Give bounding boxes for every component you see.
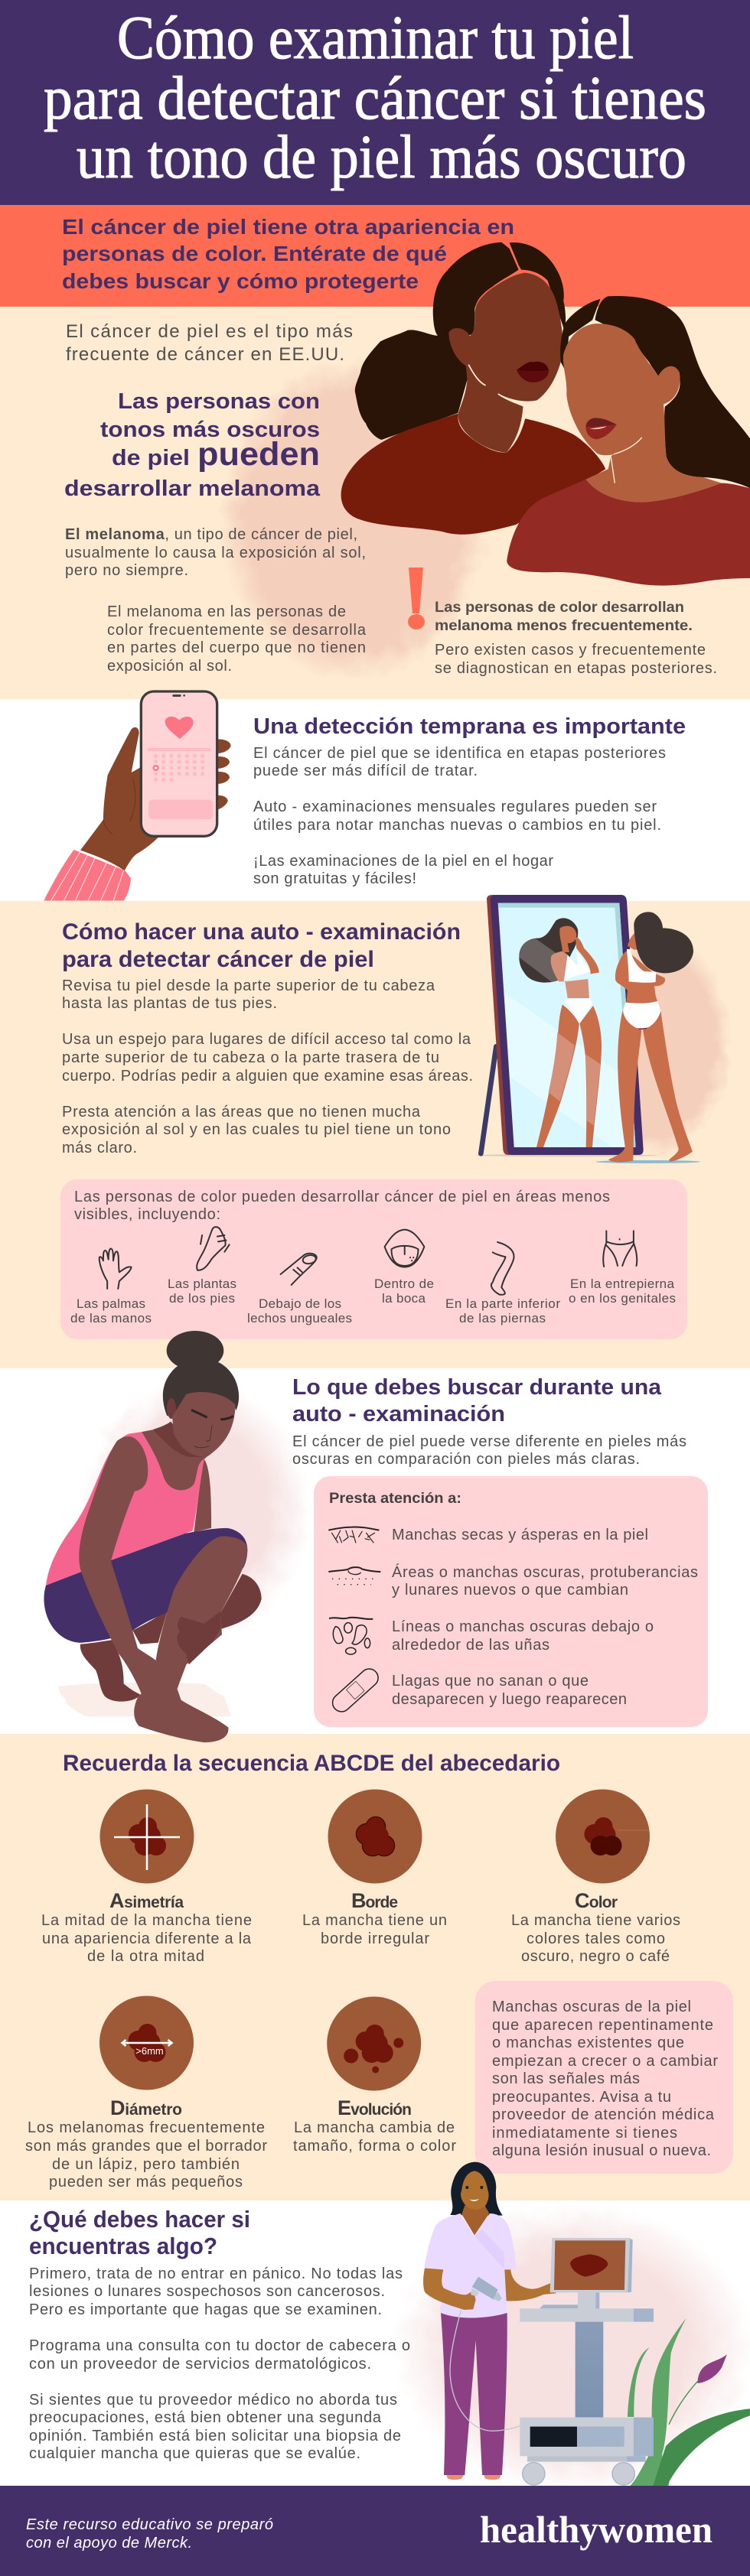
ABCDE item: evolution	[293, 1996, 456, 2155]
text: asymmetry: Asimetría	[109, 1889, 184, 1912]
labels: body areas: En la parte inferior	[445, 1296, 560, 1311]
labels: body areas: o en los genitales	[569, 1291, 676, 1306]
labels: body areas: En la entrepierna	[570, 1277, 675, 1291]
text block: melanoma location: exposición al sol.	[107, 658, 232, 675]
footer credit text	[26, 2516, 273, 2552]
footer credit text: con el apoyo de Merck.	[26, 2535, 192, 2552]
heading: ABCDE: Recuerda la secuencia ABCDE del abecedario	[63, 1751, 560, 1776]
panel: less visible areas	[60, 1179, 687, 1339]
text block: early detection body	[253, 745, 666, 887]
text block: self-exam instructions: hasta las plantas de tus pies.	[62, 995, 277, 1012]
text: diameter	[25, 2096, 267, 2191]
icon: hand	[99, 1249, 132, 1289]
section: what to look for	[292, 1375, 686, 1468]
subtitle: debes buscar y cómo protegerte	[62, 269, 419, 293]
icon: mouth	[385, 1230, 424, 1267]
text block: skin cancer frequency	[66, 321, 353, 365]
mole diagram C	[556, 1790, 650, 1883]
text: asymmetry	[41, 1889, 252, 1965]
text: evolution: La mancha cambia de	[294, 2119, 455, 2136]
text block: early detection body: útiles para notar manchas nuevas o cambios en tu piel.	[253, 817, 661, 834]
text: diameter: de un lápiz, pero también	[52, 2156, 240, 2173]
icon: finger nail	[281, 1254, 318, 1285]
section: what to do	[29, 2206, 410, 2462]
text block: melanoma definition: usualmente lo causa la exposición al sol,	[65, 545, 366, 561]
text: asymmetry: de la otra mitad	[87, 1948, 204, 1965]
text block: melanoma definition	[65, 526, 366, 579]
text: asymmetry: una apariencia diferente a la	[42, 1930, 252, 1947]
text block: less frequent melanoma	[435, 600, 717, 677]
text block: self-exam instructions: cuerpo. Podrías pedir a alguien que examine esas áreas.	[62, 1068, 473, 1085]
text block: what to do body: opinión. También está bien solicitar una biopsia de	[29, 2428, 401, 2444]
icon: foot	[197, 1227, 230, 1270]
mole diagram B	[328, 1790, 422, 1883]
subtitle: El cáncer de piel tiene otra apariencia en	[62, 215, 514, 239]
text block: what to do body: preocupaciones, está bien obtener una segunda	[29, 2409, 382, 2426]
text block: less frequent melanoma: Pero existen casos y frecuentemente	[435, 642, 706, 659]
labels: body areas: Dentro de	[374, 1277, 434, 1291]
heading: how to self-examine	[62, 919, 461, 972]
illustration: doctor with skin scanner	[423, 2162, 750, 2486]
text block: self-exam instructions: parte superior de tu cabeza o la parte trasera de tu	[62, 1049, 439, 1066]
text: diameter: son más grandes que el borrador	[25, 2138, 267, 2155]
text: border: Borde	[351, 1889, 398, 1912]
text block: what to do body: Primero, trata de no entrar en pánico. No todas las	[29, 2265, 403, 2282]
callout: warning signs: preocupantes. Avisa a tu	[492, 2089, 671, 2106]
subtitle	[62, 215, 514, 293]
text: dark patches and moles	[392, 1563, 698, 1599]
callout: warning signs: que aparecen repentinamente	[492, 2017, 713, 2034]
text: border: La mancha tiene un	[302, 1912, 447, 1929]
callout: warning signs: empiezan a crecer o a cambiar	[492, 2053, 718, 2070]
text block: skin cancer frequency: frecuente de cáncer en EE.UU.	[66, 344, 344, 365]
callout heading: darker skin can develop melanoma: desarrollar melanoma	[64, 476, 321, 501]
text: sores: Llagas que no sanan o que	[392, 1673, 589, 1690]
text block: what to do body: Pero es importante que hagas que se examinen.	[29, 2301, 382, 2318]
text: evolution: Evolución	[338, 2096, 412, 2119]
text: evolution: tamaño, forma o color	[293, 2138, 456, 2155]
icon: dry skin cracks	[328, 1527, 379, 1543]
icon: bump	[328, 1567, 380, 1585]
mole diagram D: >6mm	[135, 2045, 164, 2057]
text block: early detection body: Auto - examinaciones mensuales regulares pueden ser	[253, 798, 657, 815]
text: diameter: Diámetro	[110, 2096, 182, 2119]
labels: body areas: de las piernas	[459, 1311, 546, 1325]
footer	[0, 2486, 750, 2576]
text block: less frequent melanoma: Las personas de color desarrollan	[435, 600, 684, 616]
callout heading: darker skin can develop melanoma: Las personas con	[118, 389, 320, 414]
text block: self-exam instructions: Usa un espejo para lugares de difícil acceso tal como la	[62, 1031, 471, 1048]
heading: early detection: Una detección temprana es importante	[253, 714, 686, 739]
text block: less frequent melanoma: se diagnostican en etapas posteriores.	[435, 660, 717, 677]
labels: body areas	[70, 1277, 676, 1325]
text block: melanoma location: color frecuentemente se desarrolla	[107, 622, 367, 639]
section: how to self-examine	[62, 919, 473, 1156]
text block: what to do body: Programa una consulta con tu doctor de cabecera o	[29, 2337, 410, 2354]
text: dark lines under nails: alrededor de las uñas	[392, 1637, 549, 1654]
panel heading: Presta atención a:	[329, 1491, 461, 1507]
text block: skin cancer frequency: El cáncer de piel es el tipo más	[66, 321, 353, 342]
ABCDE item: asymmetry	[41, 1790, 252, 1965]
callout heading: darker skin can develop melanoma: pueden	[197, 436, 320, 473]
text block: melanoma location: El melanoma en las personas de	[107, 603, 346, 620]
text block: what to do body: con un proveedor de servicios dermatológicos.	[29, 2356, 371, 2373]
icon: groin	[603, 1231, 637, 1267]
illustration: hand holding phone	[44, 690, 231, 901]
mole diagram A	[99, 1790, 194, 1883]
icon: bandage	[329, 1665, 382, 1716]
text block: what to do body: Si sientes que tu proveedor médico no aborda tus	[29, 2392, 397, 2408]
callout: warning signs: proveedor de atención médica	[492, 2106, 715, 2123]
text: border	[302, 1889, 447, 1947]
text: color: colores tales como	[527, 1930, 665, 1947]
text block: skin difference	[292, 1433, 686, 1468]
text block: skin difference: oscuras en comparación con pieles más claras.	[292, 1451, 640, 1468]
heading: what to do: ¿Qué debes hacer si	[29, 2206, 250, 2233]
heading: what to look for	[292, 1375, 662, 1426]
coral subtitle band	[0, 205, 750, 307]
text block: self-exam instructions: Presta atención a las áreas que no tienen mucha	[62, 1104, 421, 1120]
text block: self-exam instructions: más claro.	[62, 1140, 137, 1156]
heading: what to look for: Lo que debes buscar durante una	[292, 1375, 662, 1400]
heading: how to self-examine: para detectar cáncer de piel	[62, 947, 374, 972]
text: diameter: Los melanomas frecuentemente	[28, 2119, 265, 2136]
text: evolution	[293, 2096, 456, 2155]
text: dark lines under nails	[392, 1618, 654, 1654]
callout: warning signs: son las señales más	[492, 2070, 640, 2087]
text: color: Color	[575, 1889, 618, 1912]
heading: how to self-examine: Cómo hacer una auto - examinación	[62, 919, 461, 945]
text: border: borde irregular	[321, 1930, 429, 1947]
text block: less frequent melanoma: melanoma menos frecuentemente.	[435, 618, 693, 634]
text: asymmetry: La mitad de la mancha tiene	[41, 1912, 252, 1929]
labels: body areas: lechos ungueales	[247, 1311, 352, 1325]
mole diagram D	[99, 1996, 194, 2090]
text block: early detection body: son gratuitas y fáciles!	[253, 870, 416, 887]
title	[44, 5, 706, 191]
text: dark patches and moles: Áreas o manchas oscuras, protuberancias	[392, 1563, 698, 1581]
text: sores: desaparecen y luego reaparecen	[392, 1691, 627, 1708]
brush background blob	[220, 359, 488, 681]
heading: what to look for: auto - examinación	[292, 1402, 505, 1426]
title: un tono de piel más oscuro	[77, 124, 686, 191]
text block: melanoma definition: El melanoma, un tipo de cáncer de piel,	[65, 526, 357, 543]
panel intro text: Las personas de color pueden desarrollar cáncer de piel en áreas menos	[74, 1189, 610, 1205]
labels: body areas: Debajo de los	[259, 1296, 341, 1311]
callout: warning signs: alguna lesión inusual o nueva.	[492, 2142, 711, 2159]
text block: melanoma definition: pero no siempre.	[65, 562, 188, 579]
text block: self-exam instructions: exposición al sol y en las cuales tu piel tiene un tono	[62, 1121, 451, 1138]
text: diameter: pueden ser más pequeños	[49, 2174, 243, 2191]
labels: body areas: de las manos	[70, 1311, 152, 1325]
illustration: crouching woman checking ankle	[44, 1331, 262, 1742]
ABCDE item: border	[302, 1790, 447, 1947]
footer credit text: Este recurso educativo se preparó	[26, 2516, 273, 2533]
subtitle: personas de color. Entérate de qué	[62, 242, 447, 265]
callout heading: darker skin can develop melanoma	[64, 389, 321, 501]
section: early detection	[253, 714, 686, 887]
text: dry patches: Manchas secas y ásperas en la piel	[392, 1527, 648, 1543]
labels: body areas: Las plantas	[168, 1277, 236, 1291]
illustration: two women	[341, 242, 750, 586]
text: dark lines under nails: Líneas o manchas oscuras debajo o	[392, 1618, 654, 1635]
brush background blob	[80, 1381, 310, 1641]
ABCDE item: diameter	[25, 1996, 267, 2191]
panel intro text	[74, 1189, 610, 1223]
text block: early detection body: El cáncer de piel que se identifica en etapas posteriores	[253, 745, 666, 762]
text block: melanoma location	[107, 603, 367, 675]
text block: what to do body: cualquier mancha que quieras que se evalúe.	[29, 2445, 360, 2462]
callout heading: darker skin can develop melanoma: de piel	[112, 446, 190, 470]
title: para detectar cáncer si tienes	[44, 65, 706, 132]
text block: self-exam instructions	[62, 977, 473, 1156]
panel: pay attention to	[314, 1476, 708, 1727]
callout heading: darker skin can develop melanoma: tonos más oscuros	[100, 418, 320, 442]
text block: early detection body: ¡Las examinaciones de la piel en el hogar	[253, 853, 553, 870]
text block: what to do body	[29, 2265, 410, 2462]
text: dark patches and moles: y lunares nuevos o que cambian	[392, 1582, 628, 1599]
text: color: oscuro, negro o café	[521, 1948, 670, 1965]
text block: skin difference: El cáncer de piel puede verse diferente en pieles más	[292, 1433, 686, 1450]
callout: warning signs: inmediatamente si tienes	[492, 2125, 677, 2142]
text block: early detection body: puede ser más difícil de tratar.	[253, 763, 478, 779]
icon: nail lines	[329, 1618, 373, 1654]
text: sores	[392, 1673, 627, 1708]
labels: body areas: de los pies	[169, 1291, 235, 1306]
heading: what to do	[29, 2206, 250, 2259]
text block: what to do body: lesiones o lunares sospechosos son cancerosos.	[29, 2283, 385, 2300]
text: color: La mancha tiene varios	[511, 1912, 680, 1929]
panel intro text: visibles, incluyendo:	[74, 1206, 220, 1223]
icon: exclamation mark	[408, 568, 425, 629]
callout: warning signs: Manchas oscuras de la piel	[492, 1999, 691, 2015]
text block: self-exam instructions: Revisa tu piel desde la parte superior de tu cabeza	[62, 977, 435, 994]
callout: warning signs: o manchas existentes que	[492, 2034, 684, 2051]
logo: healthywomen: healthywomen	[480, 2508, 712, 2551]
icon: lower leg	[491, 1242, 514, 1295]
callout: warning signs	[475, 1981, 733, 2174]
brush background blob	[394, 2203, 750, 2493]
header banner	[0, 0, 750, 205]
brush background blob	[570, 929, 731, 1159]
title: Cómo examinar tu piel	[117, 5, 634, 72]
labels: body areas: la boca	[382, 1291, 426, 1306]
text block: melanoma location: en partes del cuerpo que no tienen	[107, 639, 366, 656]
text: color	[511, 1889, 680, 1965]
ABCDE item: color	[511, 1790, 680, 1965]
heading: what to do: encuentras algo?	[29, 2233, 217, 2259]
illustration: woman at mirror	[476, 895, 700, 1163]
labels: body areas: Las palmas	[77, 1296, 145, 1311]
mole diagram E	[327, 1996, 421, 2091]
